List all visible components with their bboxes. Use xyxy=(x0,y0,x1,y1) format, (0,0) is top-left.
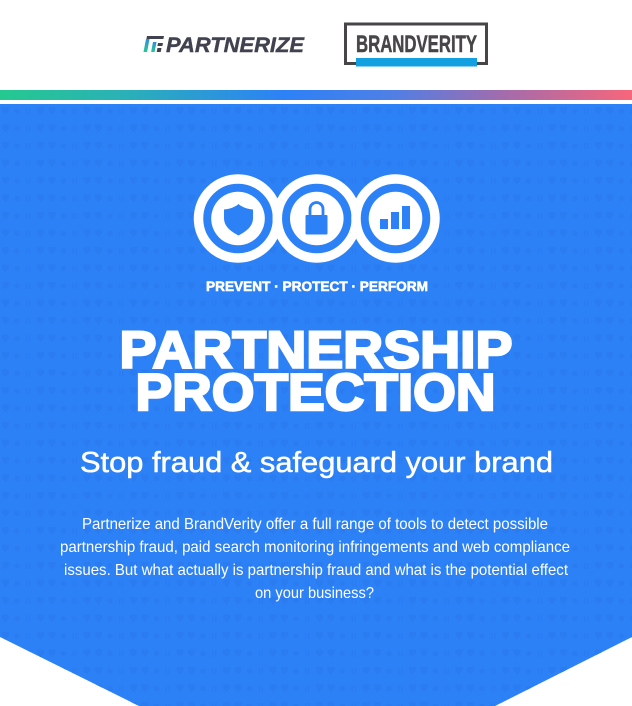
title: PARTNERSHIP xyxy=(120,322,512,380)
logo underline xyxy=(356,58,477,66)
wordmark: Partnerize: PARTNERIZE xyxy=(166,33,305,57)
intro paragraph: on your business? xyxy=(255,585,374,602)
logo frame xyxy=(346,24,486,64)
tagline: PREVENT · PROTECT · PERFORM xyxy=(206,278,428,294)
title: PROTECTION xyxy=(136,364,496,422)
intro paragraph: issues. But what actually is partnership fraud and what is the potential effect xyxy=(64,562,569,579)
intro paragraph: partnership fraud, paid search monitoring infringements and web compliance xyxy=(60,539,570,556)
icon: bar chart xyxy=(356,179,435,258)
icon: padlock xyxy=(277,179,356,258)
icon: shield xyxy=(198,179,278,258)
logo: Partnerize xyxy=(144,33,305,57)
gradient divider bar xyxy=(0,90,632,100)
subtitle: Stop fraud & safeguard your brand xyxy=(80,447,553,479)
intro paragraph xyxy=(60,516,570,602)
icon group: three rings xyxy=(198,179,435,258)
icon: Partnerize mark xyxy=(144,36,164,52)
title xyxy=(120,322,512,422)
intro paragraph: Partnerize and BrandVerity offer a full range of tools to detect possible xyxy=(82,516,548,533)
logo: BrandVerity xyxy=(346,24,486,66)
wordmark: BrandVerity: BRANDVERITY xyxy=(356,31,477,58)
